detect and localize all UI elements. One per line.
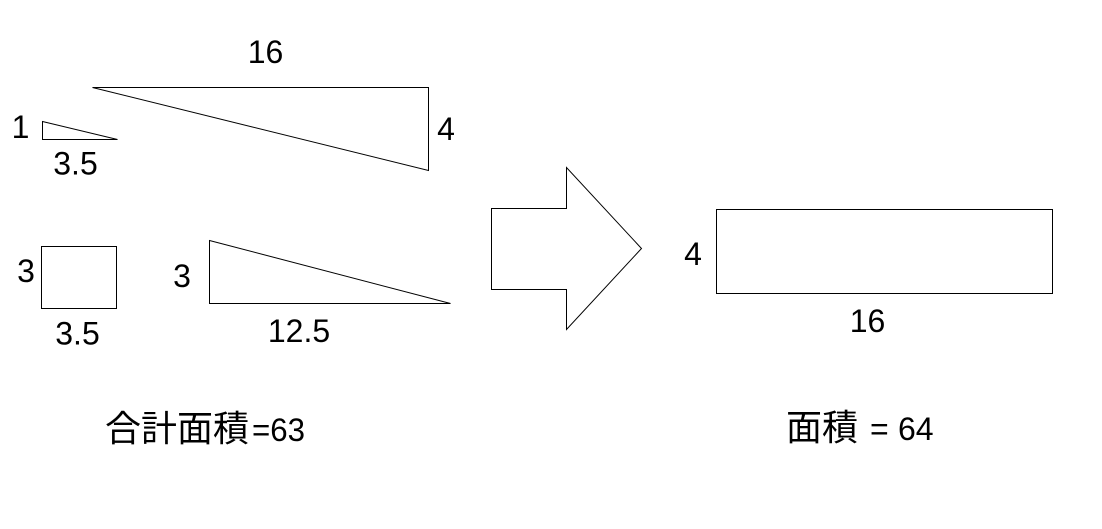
small triangle: 3.5 bbox=[53, 146, 98, 182]
large triangle bbox=[92, 34, 455, 170]
square: 3.5 bbox=[55, 316, 100, 352]
small triangle: 1 bbox=[12, 109, 29, 145]
rectangle: 16 bbox=[850, 303, 885, 339]
large triangle: 16 bbox=[248, 34, 283, 70]
medium triangle: 12.5 bbox=[268, 313, 330, 349]
small triangle bbox=[12, 109, 118, 182]
medium triangle: 3 bbox=[173, 258, 191, 294]
caption: area: = bbox=[870, 411, 889, 447]
caption: total area: 合計面積 bbox=[105, 408, 249, 449]
arrow bbox=[492, 168, 642, 330]
caption: area: 64 bbox=[898, 411, 934, 447]
square bbox=[17, 246, 116, 352]
rectangle: 4 bbox=[684, 236, 702, 272]
square: 3 bbox=[17, 253, 35, 289]
caption: area bbox=[786, 407, 934, 448]
medium triangle bbox=[173, 240, 450, 349]
rectangle bbox=[684, 210, 1052, 339]
caption: total area: =63 bbox=[252, 412, 305, 448]
caption: area: 面積 bbox=[786, 407, 858, 448]
large triangle: 4 bbox=[437, 111, 455, 147]
